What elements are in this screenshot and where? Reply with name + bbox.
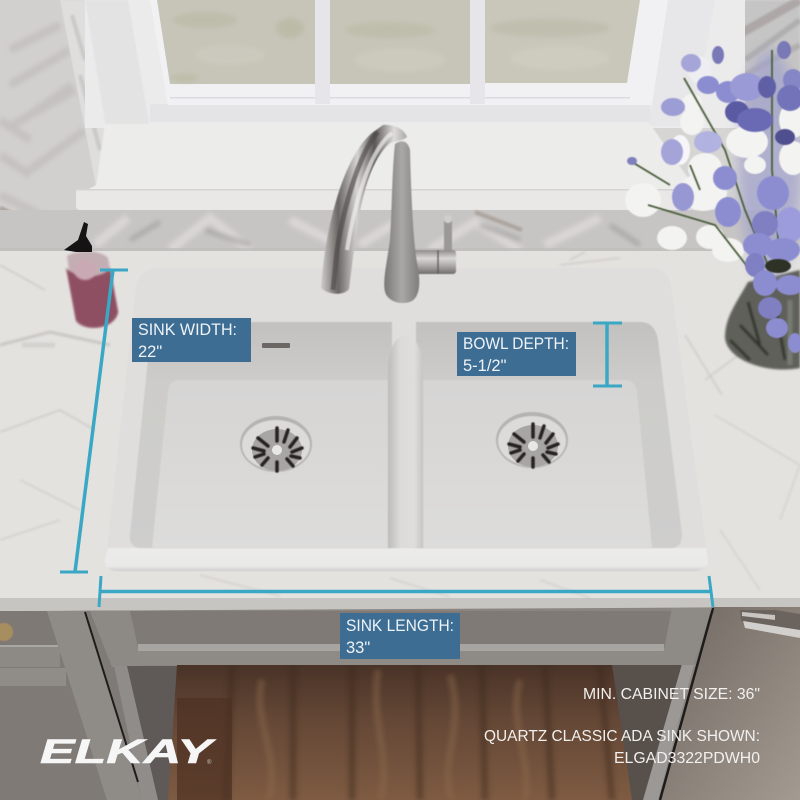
inner cabinet sides (85, 612, 694, 800)
brand logo: Elkay (40, 733, 217, 771)
window frame and mouldings (85, 0, 745, 128)
dimension line: bowl depth (593, 323, 622, 386)
callout: sink width (132, 318, 251, 362)
dimension line: sink width (60, 270, 128, 572)
callout: sink length: 33" (346, 639, 370, 657)
countertop (0, 251, 800, 611)
cabinet face frame (130, 608, 712, 665)
white petals (625, 56, 800, 262)
window panes: outdoor view (157, 0, 640, 104)
faucet handle (410, 215, 456, 274)
callout: sink width: SINK WIDTH: (138, 321, 237, 339)
callout: sink length (340, 613, 460, 659)
note: model shown (484, 728, 760, 767)
flower centre (765, 259, 791, 273)
flower mass shading (738, 50, 800, 280)
bowl divider (388, 336, 423, 548)
left drain (240, 416, 312, 472)
callout: sink width: 22" (138, 343, 162, 361)
wood floor (168, 665, 632, 800)
right bowl (416, 322, 682, 548)
right drain (496, 412, 568, 468)
dimension line: sink length (99, 576, 713, 607)
callout: bowl depth: 5-1/2" (463, 357, 507, 375)
left lower cabinet (0, 611, 142, 800)
sink deck (106, 268, 708, 571)
right lower cabinet and dishwasher (660, 607, 800, 800)
stems (632, 50, 780, 270)
sink logo badge (262, 343, 290, 348)
brand logo: Elkay: ELKAY (40, 733, 217, 771)
left bowl (130, 322, 392, 548)
marble wall tile, right (715, 0, 800, 130)
faucet spout (321, 125, 407, 294)
brand logo: Elkay: ® (207, 759, 212, 766)
sink (105, 268, 708, 571)
sink front rim (105, 548, 708, 571)
callout: sink length: SINK LENGTH: (346, 617, 454, 635)
note: minimum cabinet size: MIN. CABINET SIZE: 36" (583, 686, 760, 703)
callout: bowl depth: BOWL DEPTH: (463, 335, 569, 353)
chevron backsplash (0, 210, 800, 252)
callout: bowl depth (457, 332, 576, 376)
faucet (321, 125, 456, 303)
soap bottle (64, 222, 118, 328)
vase (725, 270, 800, 370)
note: model shown: ELGAD3322PDWH0 (614, 750, 760, 767)
flowers in vase (625, 41, 800, 370)
wall background (0, 0, 800, 252)
marble chevron wall tile, left (0, 0, 110, 231)
window sill (76, 124, 700, 210)
note: model shown: QUARTZ CLASSIC ADA SINK SHOWN: (484, 728, 760, 745)
faucet body (384, 141, 419, 303)
purple petals (627, 41, 800, 353)
